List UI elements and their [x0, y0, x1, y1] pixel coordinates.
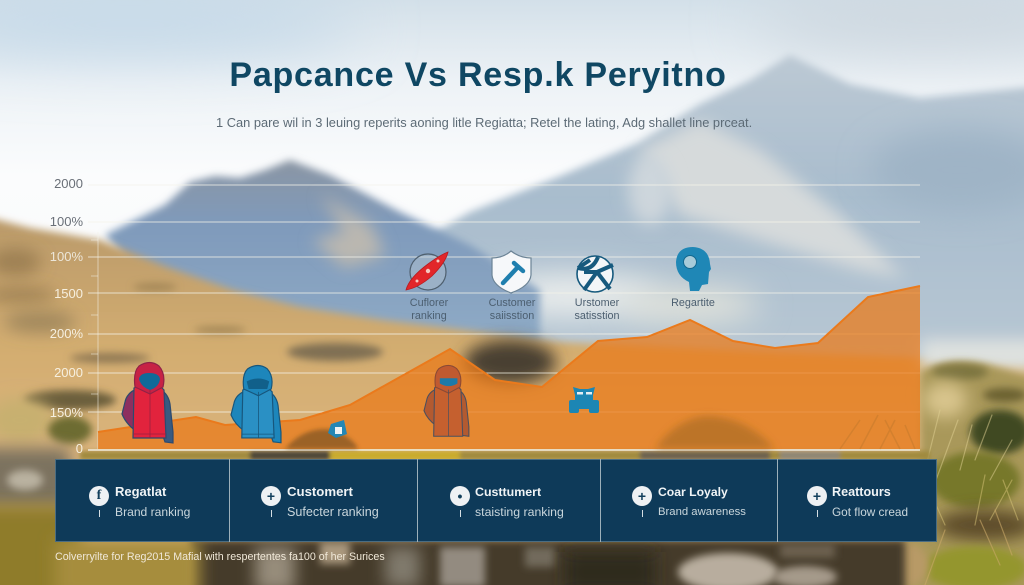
metric: Custtumert: staisting ranking	[475, 505, 564, 519]
caption: globe: Urstomer	[575, 297, 619, 309]
metric: Custtumert: •	[458, 488, 462, 504]
caption: shield: saiisstion	[490, 310, 534, 322]
caption: kayak: Cuflorer	[410, 297, 448, 309]
caption: shield: Customer	[489, 297, 535, 309]
jacket: red	[122, 362, 173, 443]
strip under chart	[80, 451, 930, 460]
metric: Coar Loyaly: Brand awareness	[658, 506, 746, 518]
icon: red kayak	[406, 252, 448, 290]
metric: Regatlat: f	[97, 488, 101, 503]
text: 100%	[50, 214, 83, 229]
icon: globe	[577, 256, 613, 292]
text: 2000	[54, 176, 83, 191]
icon: head	[676, 247, 711, 291]
caption: shield	[489, 297, 536, 322]
title: Papcance Vs Resp.k Peryitno	[229, 56, 727, 94]
caption: kayak	[410, 297, 448, 322]
metric: Coar Loyaly: +	[638, 488, 646, 504]
panel: metrics band	[55, 459, 937, 542]
icon: blue robot	[569, 387, 599, 413]
metric: Reattours	[777, 459, 937, 542]
metric: Regatlat	[89, 484, 190, 519]
metric: Reattours: Got flow cread	[832, 505, 908, 519]
caption: globe	[574, 297, 620, 322]
metric: Customert: Sufecter ranking	[287, 505, 379, 519]
jacket: blue	[231, 365, 281, 443]
icon: shield with wrench	[492, 251, 531, 293]
text: 0	[76, 441, 83, 456]
bottom rocks	[190, 540, 905, 585]
y-axis labels	[50, 176, 83, 456]
text: 2000	[54, 365, 83, 380]
text: 150%	[50, 405, 83, 420]
caption: kayak: ranking	[411, 310, 447, 322]
right grass	[921, 340, 1024, 370]
metric: Regatlat: Regatlat	[115, 484, 166, 499]
footnote: Colverryilte for Reg2015 Mafial with respertentes fa100 of her Surices	[55, 551, 385, 563]
icon: small backpack	[328, 420, 347, 438]
metric: Customert	[229, 459, 418, 542]
hill and ground	[0, 215, 1024, 585]
metric: Custtumert	[417, 459, 601, 542]
metric: Reattours: Reattours	[832, 485, 891, 499]
metric: Regatlat: Brand ranking	[115, 505, 190, 519]
text: 1500	[54, 286, 83, 301]
text: 200%	[50, 326, 83, 341]
metric: Coar Loyaly	[600, 459, 777, 542]
metric: Custtumert: Custtumert	[475, 485, 541, 499]
caption: globe: satisstion	[574, 310, 620, 322]
jacket: orange	[424, 365, 469, 436]
metric: Customert: Customert	[287, 484, 353, 499]
metric: Coar Loyaly: Coar Loyaly	[658, 485, 728, 499]
subtitle: 1 Can pare wil in 3 leuing reperits aoning litle Regiatta; Retel the lating, Adg shallet line prceat.	[216, 115, 752, 130]
caption: head: Regartite	[671, 297, 715, 309]
left foreground	[0, 448, 70, 508]
far mountain	[425, 55, 1024, 370]
near mountain	[105, 160, 540, 345]
metric: Customert: +	[267, 488, 275, 504]
metric: Reattours: +	[813, 488, 821, 504]
text: 100%	[50, 249, 83, 264]
